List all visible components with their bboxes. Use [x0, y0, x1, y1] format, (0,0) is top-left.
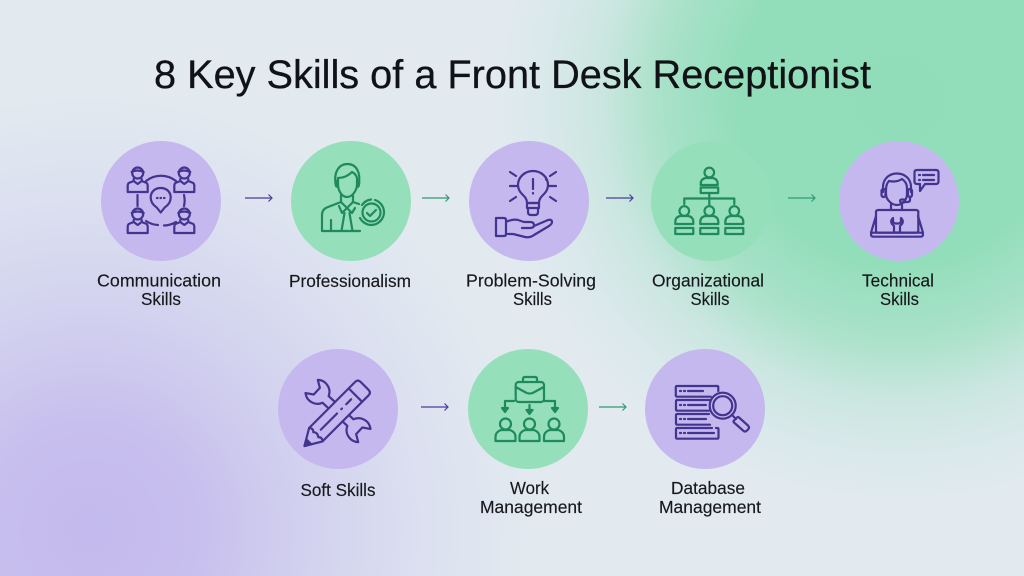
step: Organizational Skills: [651, 141, 771, 309]
label: [659, 478, 761, 517]
label: Skills: [141, 289, 181, 309]
arrow: [245, 194, 272, 202]
step: Problem-Solving Skills: [466, 141, 596, 309]
icon: support agent with laptop: [871, 170, 938, 237]
label: Work: [510, 478, 549, 498]
arrow: [606, 194, 633, 202]
label: Skills: [513, 289, 552, 309]
label: Soft Skills: [300, 480, 376, 500]
arrow: [422, 194, 449, 202]
arrow: [788, 194, 815, 202]
step: Work Management: [468, 349, 588, 517]
label: Skills: [690, 289, 730, 309]
step: Professionalism: [289, 141, 411, 291]
label: Problem-Solving: [466, 270, 596, 290]
arrow: [421, 404, 448, 410]
label: Organizational: [652, 270, 764, 290]
icon: briefcase delegating to team: [496, 377, 564, 441]
label: Professionalism: [289, 271, 411, 291]
icon: people around a speech bubble: [128, 168, 194, 233]
icon: crossed wrench and pencil: [298, 378, 372, 453]
label: Skills: [880, 289, 919, 309]
label: Management: [480, 497, 582, 517]
label: [862, 270, 934, 309]
label: Communication: [97, 270, 221, 290]
icon: organization chart: [675, 168, 743, 234]
label: [480, 478, 582, 517]
label: Management: [659, 497, 761, 517]
icon: server stack with magnifier: [676, 386, 749, 439]
icon: professional with badge: [322, 164, 384, 231]
label: Technical: [862, 270, 934, 290]
step: Database Management: [645, 349, 765, 517]
step: Communication Skills: [97, 141, 221, 309]
label: [466, 270, 596, 309]
label: Database: [671, 478, 745, 498]
arrow: [599, 404, 626, 410]
label: [97, 270, 221, 309]
icon: light bulb over a hand: [496, 171, 556, 237]
step: Soft Skills: [278, 349, 398, 500]
label: [652, 270, 764, 309]
title: 8 Key Skills of a Front Desk Receptionist: [154, 53, 871, 97]
step: Technical Skills: [839, 141, 959, 309]
